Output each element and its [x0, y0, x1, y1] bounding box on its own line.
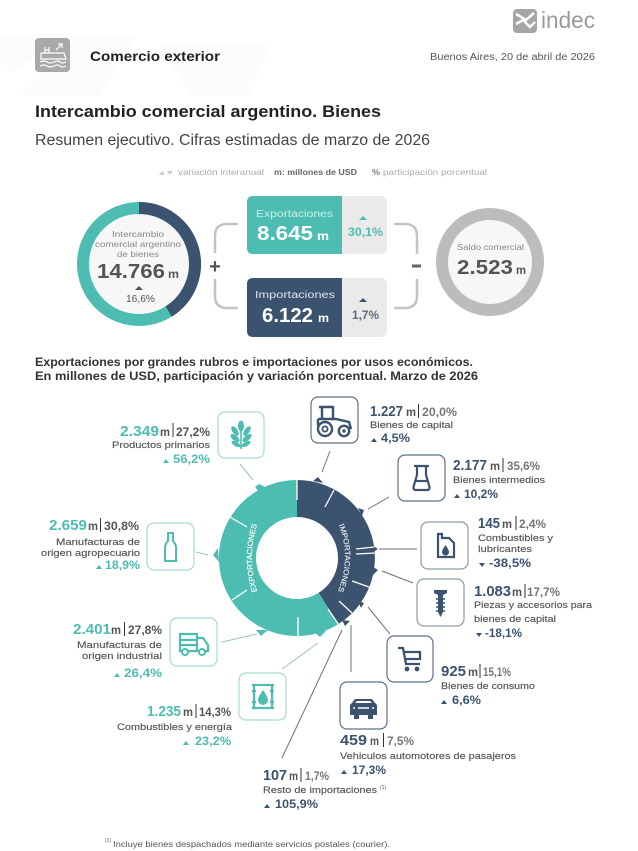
item: vehiculos automotores: 7,5%	[387, 734, 414, 748]
item: combustibles y lubricantes	[421, 516, 553, 570]
item: productos primarios: m	[160, 425, 170, 439]
icon: car	[340, 682, 387, 729]
donut: saldo comercial: Saldo comercial	[457, 242, 524, 252]
item: bienes intermedios: 2.177	[453, 458, 487, 474]
donut: intercambio comercial	[83, 208, 195, 320]
item: combustibles y lubricantes: m	[502, 517, 512, 531]
item: productos primarios: 27,2%	[176, 425, 210, 439]
item: bienes de consumo: Bienes de consumo	[441, 681, 535, 692]
segment: importaciones	[296, 477, 378, 626]
item: bienes de consumo: 925	[441, 664, 466, 680]
chart heading: En millones de USD, participación y variación porcentual. Marzo de 2026	[35, 371, 478, 383]
item: productos primarios: 56,2%	[173, 452, 210, 466]
item: bienes intermedios: 10,2%	[464, 487, 498, 501]
item: productos primarios: Productos primarios	[112, 440, 210, 451]
item: piezas y accesorios	[417, 579, 593, 640]
donut: intercambio comercial: comercial argentino	[95, 239, 181, 249]
item: manufacturas de origen industrial	[73, 618, 217, 680]
item: manufacturas de origen agropecuario: 2.659	[49, 518, 87, 534]
item: piezas y accesorios: 1.083	[474, 584, 511, 600]
item: combustibles y lubricantes: 2,4%	[519, 517, 546, 531]
item: manufacturas de origen agropecuario: 18,9%	[105, 558, 140, 572]
item: piezas y accesorios: m	[512, 585, 522, 599]
footnote: Incluye bienes despachados mediante servicios postales (courier).	[113, 840, 390, 849]
item: resto de importaciones: 107	[263, 768, 287, 784]
chart heading	[35, 357, 478, 383]
item: combustibles y lubricantes: 145	[478, 516, 500, 532]
item: productos primarios: 2.349	[120, 424, 159, 440]
item: bienes de consumo: 6,6%	[452, 693, 481, 707]
item: bienes de capital: m	[406, 405, 416, 419]
item: vehiculos automotores: Vehiculos automotores de pasajeros	[340, 751, 516, 762]
date: Buenos Aires, 20 de abril de 2026	[430, 52, 595, 63]
legend: participación porcentual	[383, 167, 487, 177]
donut: intercambio comercial: 16,6%	[126, 293, 155, 305]
panel: exportaciones: Exportaciones	[256, 209, 333, 220]
donut: intercambio comercial: de bienes	[117, 249, 159, 259]
item: resto de importaciones: 105,9%	[275, 797, 318, 811]
item: vehiculos automotores: m	[370, 734, 379, 748]
item: combustibles y energia: 23,2%	[195, 734, 231, 748]
item: combustibles y energia	[117, 673, 286, 748]
item: bienes de capital	[311, 397, 457, 445]
plus sign: +	[209, 256, 221, 278]
item: resto de importaciones: Resto de importaciones	[263, 785, 377, 796]
icon: truck	[170, 618, 217, 666]
item: manufacturas de origen industrial: 26,4%	[124, 666, 162, 680]
footnote	[105, 838, 390, 849]
item: manufacturas de origen agropecuario: 30,8%	[104, 519, 139, 533]
item: bienes de capital: 1.227	[370, 404, 403, 420]
item: bienes intermedios	[398, 455, 545, 501]
legend: variación interanual	[178, 167, 264, 177]
item: manufacturas de origen industrial: 2.401	[73, 622, 111, 638]
panel: importaciones: Importaciones	[255, 290, 335, 301]
icon: bottle	[147, 523, 194, 570]
item: resto de importaciones: (1)	[380, 785, 386, 791]
panel: importaciones: 6.122	[262, 305, 313, 327]
item: bienes de capital: Bienes de capital	[370, 420, 453, 431]
item: bienes de consumo: m	[468, 665, 478, 679]
item: bienes intermedios: 35,6%	[507, 459, 540, 473]
item: resto de importaciones: 1,7%	[305, 769, 329, 783]
icon: barrel	[239, 673, 286, 720]
item: bienes de capital: 4,5%	[381, 431, 410, 445]
item: vehiculos automotores	[340, 682, 516, 777]
donut: saldo comercial: m	[516, 263, 526, 277]
icon: wheat	[218, 412, 264, 458]
item: manufacturas de origen agropecuario: m	[88, 519, 98, 533]
icon: fuel can	[421, 522, 468, 569]
item: combustibles y lubricantes: -38,5%	[489, 556, 531, 570]
item: piezas y accesorios: bienes de capital	[474, 614, 556, 625]
segment: importaciones: IMPORTACIONES	[338, 524, 350, 592]
item: resto de importaciones: m	[289, 769, 298, 783]
item: piezas y accesorios: -18,1%	[485, 626, 522, 640]
item: combustibles y energia: 14,3%	[199, 705, 231, 719]
icon: ship	[35, 38, 70, 72]
item: bienes de consumo	[387, 636, 535, 707]
item: manufacturas de origen agropecuario	[41, 518, 194, 572]
item: resto de importaciones	[263, 768, 386, 811]
minus sign	[412, 264, 421, 268]
panel: exportaciones: m	[317, 229, 329, 243]
item: manufacturas de origen industrial: m	[111, 623, 121, 637]
footnote: (1)	[105, 838, 111, 844]
legend	[159, 167, 487, 177]
icon: tractor	[311, 397, 358, 443]
panel: importaciones: 1,7%	[352, 308, 379, 322]
segment: exportaciones: EXPORTACIONES	[246, 524, 257, 592]
main heading: Intercambio comercial argentino. Bienes	[35, 102, 381, 121]
segment: exportaciones	[213, 480, 338, 637]
item: bienes intermedios: Bienes intermedios	[453, 475, 545, 486]
donut: saldo comercial: 2.523	[457, 257, 513, 279]
chart heading: Exportaciones por grandes rubros e importaciones por usos económicos.	[35, 357, 473, 369]
item: manufacturas de origen agropecuario: origen agropecuario	[41, 548, 140, 559]
panel: exportaciones	[247, 196, 387, 254]
item: combustibles y lubricantes: Combustibles y	[478, 533, 553, 544]
item: productos primarios	[112, 412, 264, 466]
bracket right	[394, 224, 417, 308]
subheading: Resumen ejecutivo. Cifras estimadas de marzo de 2026	[35, 132, 430, 149]
legend: m: millones de USD	[274, 167, 357, 177]
donut: intercambio comercial: m	[168, 267, 179, 281]
panel: importaciones	[247, 278, 387, 337]
item: combustibles y energia: 1.235	[147, 704, 181, 720]
item: manufacturas de origen industrial: 27,8%	[128, 623, 162, 637]
item: combustibles y energia: m	[183, 705, 193, 719]
icon: shopping cart	[387, 636, 433, 682]
leader lines	[196, 451, 417, 758]
section title: Comercio exterior	[90, 48, 221, 64]
item: manufacturas de origen industrial: origen industrial	[82, 651, 162, 662]
item: bienes de capital: 20,0%	[422, 405, 457, 419]
item: manufacturas de origen agropecuario: Manufacturas de	[56, 537, 140, 548]
panel: exportaciones: 30,1%	[348, 225, 383, 239]
item: manufacturas de origen industrial: Manufacturas de	[77, 640, 162, 651]
item: bienes intermedios: m	[490, 459, 500, 473]
donut: intercambio comercial: Intercambio	[112, 229, 164, 239]
icon: flask	[398, 455, 445, 501]
item: vehiculos automotores: 459	[340, 733, 367, 749]
item: combustibles y lubricantes: lubricantes	[478, 544, 532, 555]
panel: importaciones: m	[318, 311, 329, 325]
bracket left	[215, 224, 238, 308]
item: piezas y accesorios: Piezas y accesorios para	[474, 600, 593, 611]
logo: indec: indec	[541, 7, 595, 33]
item: piezas y accesorios: 17,7%	[527, 585, 560, 599]
panel: exportaciones: 8.645	[257, 223, 313, 245]
item: vehiculos automotores: 17,3%	[352, 763, 386, 777]
chart: central donut	[213, 477, 378, 637]
item: bienes de consumo: 15,1%	[483, 665, 511, 679]
icon: screw	[417, 579, 464, 626]
legend: %	[372, 167, 380, 177]
donut: intercambio comercial: 14.766	[97, 261, 165, 283]
logo: indec	[513, 7, 595, 33]
donut: saldo comercial	[442, 214, 538, 310]
item: combustibles y energia: Combustibles y energía	[117, 722, 233, 733]
